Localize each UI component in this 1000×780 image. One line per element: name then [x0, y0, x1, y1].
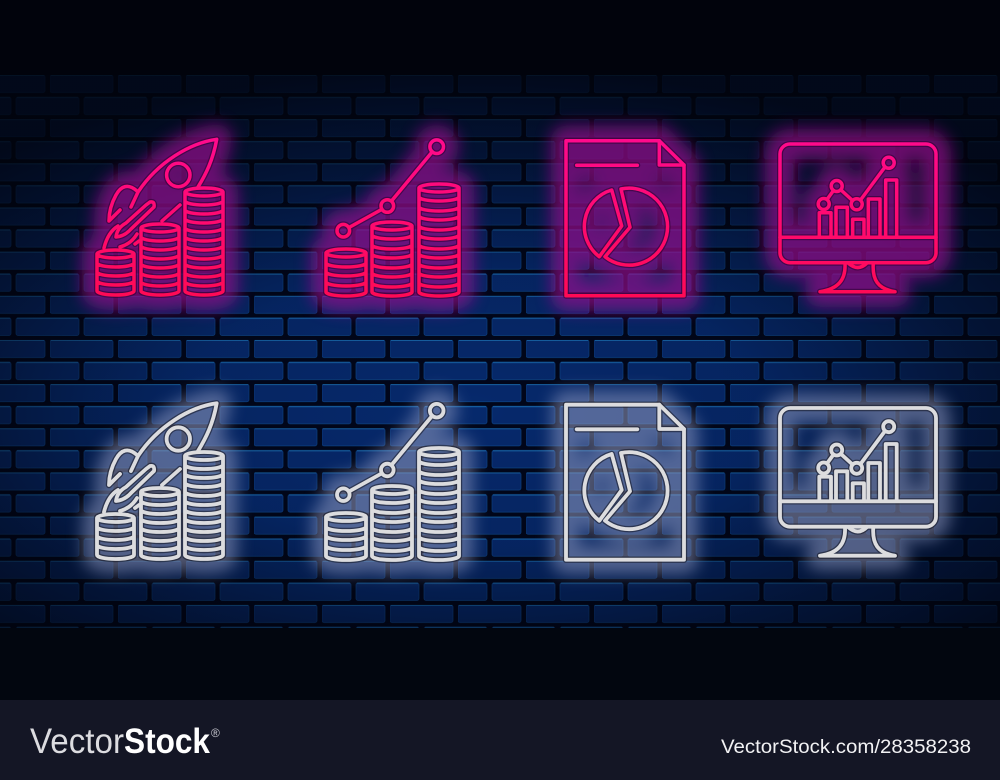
footer logo: Vector: [30, 722, 124, 761]
footer logo: Stock: [124, 722, 210, 761]
icon: white growth chart with coins: [326, 404, 459, 560]
icon: white monitor with chart: [780, 408, 936, 556]
footer image id: VectorStock.com/28358238: [721, 736, 971, 758]
background: brick wall: [0, 75, 1000, 628]
footer bar: [0, 700, 1000, 780]
floor band: [0, 628, 1000, 700]
icon: pink monitor with chart: [780, 144, 936, 292]
footer logo: [30, 722, 220, 761]
icon: pink rocket and coins: [97, 139, 223, 295]
background: light falloff: [0, 75, 1000, 628]
icon: pink growth chart with coins: [326, 140, 459, 296]
footer logo: ®: [211, 726, 220, 740]
icon: pink pie chart document: [566, 141, 684, 296]
icon: white pie chart document: [566, 405, 684, 560]
icon: white rocket and coins: [97, 403, 223, 559]
